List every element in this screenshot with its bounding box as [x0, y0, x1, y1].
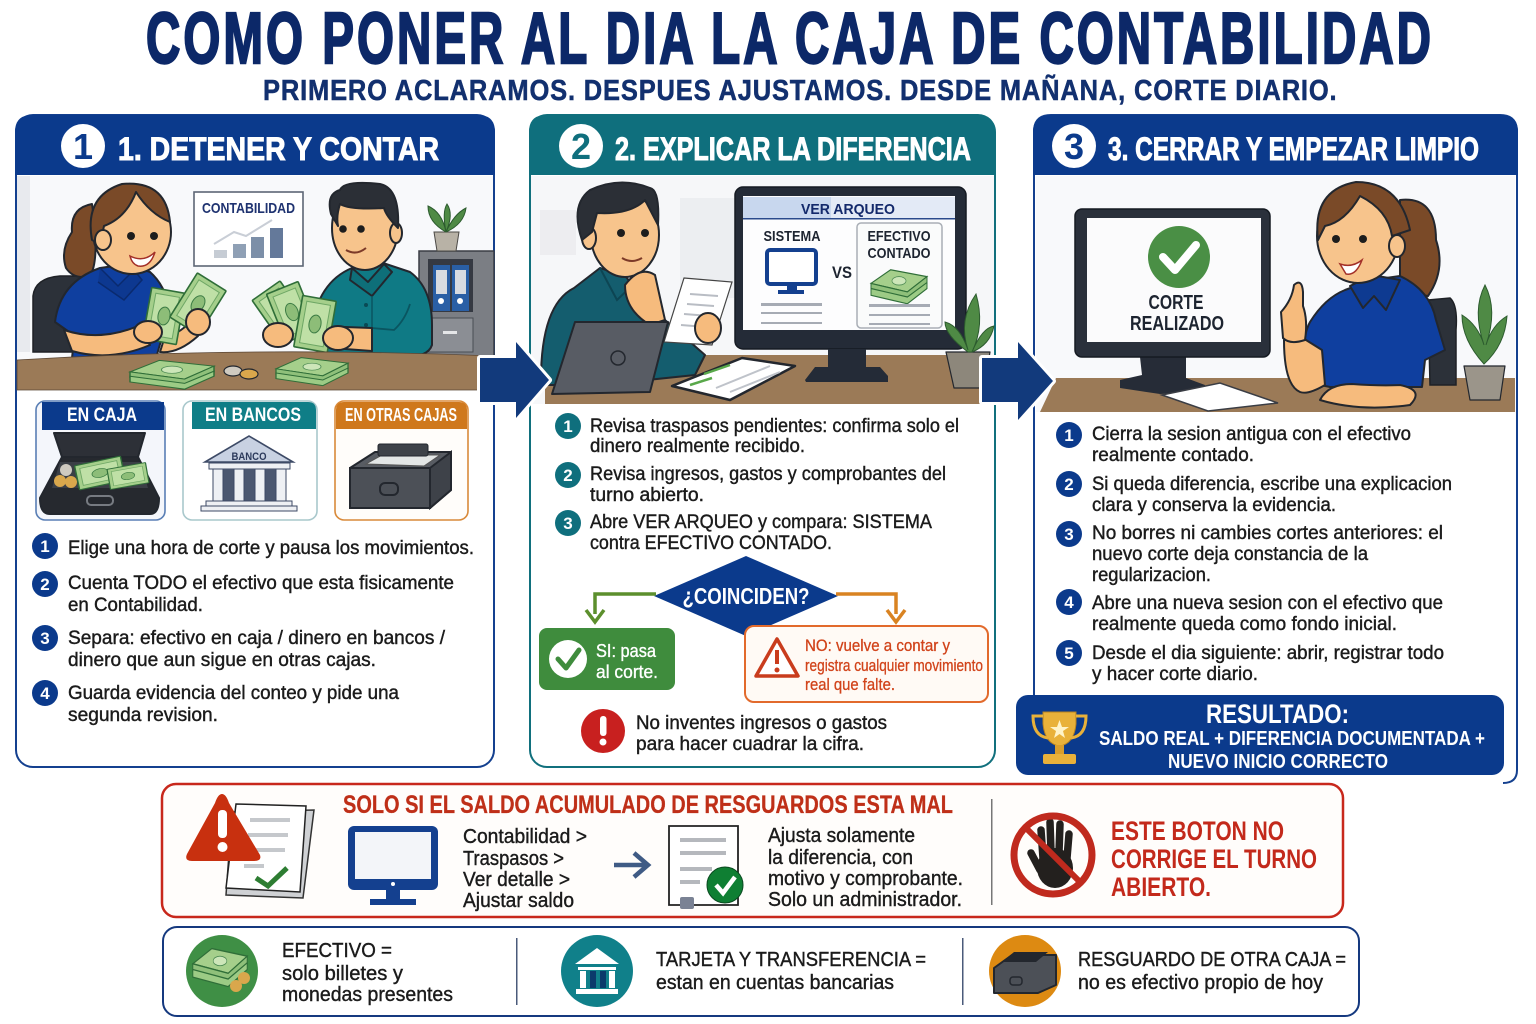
warning heading: SOLO SI EL SALDO ACUMULADO DE RESGUARDOS ESTA MAL	[343, 791, 953, 819]
outcome: yes: SI: pasa	[596, 641, 657, 661]
item 3.5	[1056, 640, 1444, 685]
card: en bancos	[183, 401, 317, 520]
man counting bills	[252, 183, 432, 357]
panel 2 header: 2	[571, 126, 591, 167]
list: step 3	[1056, 422, 1452, 685]
potted plant	[945, 294, 994, 388]
subtitle: PRIMERO ACLARAMOS. DESPUES AJUSTAMOS. DESDE MAÑANA, CORTE DIARIO.	[263, 73, 1337, 106]
legend: resguardo de otra caja: RESGUARDO DE OTRA CAJA =	[1078, 949, 1346, 971]
panel: saldo acumulado warning	[162, 784, 1343, 917]
monitor: ver arqueo: SISTEMA	[764, 228, 821, 245]
item 2.2: 2	[563, 466, 573, 485]
item 1.4	[32, 680, 399, 726]
item 3.1: Cierra la sesion antigua con el efectivo	[1092, 423, 1411, 445]
item 1.3: Separa: efectivo en caja / dinero en bancos /	[68, 627, 446, 649]
route text: Ver detalle >	[463, 869, 570, 891]
item 3.2: 2	[1064, 475, 1074, 494]
item 3.1: 1	[1064, 426, 1074, 445]
item 1.3: dinero que aun sigue en otras cajas.	[68, 649, 376, 671]
result banner	[1016, 695, 1504, 775]
legend: resguardo de otra caja	[989, 935, 1346, 1007]
monitor: corte realizado: REALIZADO	[1130, 313, 1224, 335]
icon: warning triangle and document	[186, 794, 314, 898]
illustration: two people counting cash	[17, 176, 494, 390]
arrow: yes	[586, 594, 656, 622]
monitor: corte realizado	[1075, 209, 1270, 394]
item 2.3	[555, 510, 932, 554]
result banner: RESULTADO:	[1206, 699, 1349, 729]
item 3.4: realmente queda como fondo inicial.	[1092, 613, 1397, 635]
outcome: yes	[539, 628, 675, 690]
legend: efectivo: EFECTIVO =	[282, 940, 392, 962]
item 1.4: Guarda evidencia del conteo y pide una	[68, 682, 399, 704]
item 1.3	[32, 625, 446, 671]
panel 3 header: 3	[1064, 126, 1084, 167]
item 2.3: contra EFECTIVO CONTADO.	[590, 532, 832, 554]
adjustment text: Solo un administrador.	[768, 889, 962, 911]
item 2.3: 3	[563, 514, 573, 533]
item 1.1: 1	[40, 537, 50, 556]
item 3.1: realmente contado.	[1092, 444, 1254, 466]
outcome: no: real que falte.	[805, 676, 895, 694]
woman	[1281, 182, 1456, 408]
list: step 1	[32, 533, 474, 726]
item 3.3: regularizacion.	[1092, 564, 1211, 586]
panel 1 header: 1	[73, 126, 93, 167]
card: en caja	[36, 401, 165, 520]
route text: Ajustar saldo	[463, 890, 574, 912]
legend: tarjeta y transferencia: estan en cuentas bancarias	[656, 972, 894, 994]
item 2.2	[555, 462, 946, 506]
panel 3 header	[1033, 115, 1518, 175]
panel 1 header	[15, 115, 495, 175]
result banner: NUEVO INICIO CORRECTO	[1168, 750, 1388, 773]
adjustment text: la diferencia, con	[768, 847, 913, 869]
woman counting bills	[33, 184, 226, 358]
item 3.2	[1056, 471, 1452, 516]
monitor: ver arqueo: VER ARQUEO	[801, 201, 895, 218]
item 1.4: segunda revision.	[68, 704, 218, 726]
panel: 3. cerrar y empezar limpio	[1016, 115, 1518, 783]
filing cabinet with plant	[419, 204, 494, 357]
item 1.2	[32, 571, 454, 616]
chart board: contabilidad: CONTABILIDAD	[202, 200, 295, 217]
man thinking with paper	[541, 182, 732, 394]
monitor: ver arqueo: VS	[832, 263, 852, 282]
warning statement: CORRIGE EL TURNO	[1111, 844, 1317, 874]
illustration: woman with thumbs up	[1036, 176, 1515, 412]
monitor: corte realizado: CORTE	[1148, 292, 1204, 314]
route text: Traspasos >	[463, 848, 564, 870]
legend: efectivo: monedas presentes	[282, 984, 453, 1006]
monitor: ver arqueo	[735, 187, 966, 382]
arrow: no	[836, 594, 905, 622]
item 3.2: clara y conserva la evidencia.	[1092, 494, 1336, 516]
outcome: yes: al corte.	[596, 662, 658, 682]
panel: legend	[163, 927, 1359, 1016]
item 2.1: 1	[563, 417, 573, 436]
adjustment text: Ajusta solamente	[768, 825, 915, 847]
monitor: ver arqueo: EFECTIVO	[868, 228, 931, 245]
item 3.3: 3	[1064, 525, 1074, 544]
warning statement	[1111, 816, 1317, 902]
icon: prohibited hand	[1014, 816, 1092, 894]
item 2.2: Revisa ingresos, gastos y comprobantes del	[590, 463, 946, 485]
warning statement: ESTE BOTON NO	[1111, 816, 1284, 846]
potted plant	[1462, 285, 1507, 400]
item 2.1	[555, 413, 959, 457]
warning statement: ABIERTO.	[1111, 872, 1211, 902]
decision diamond: ¿COINCIDEN?	[682, 583, 810, 609]
item 3.2: Si queda diferencia, escribe una explicacion	[1092, 473, 1452, 495]
arrow: route to document	[614, 853, 648, 877]
item 3.5: Desde el dia siguiente: abrir, registrar todo	[1092, 642, 1444, 664]
panel 1 header: 1. DETENER Y CONTAR	[118, 131, 439, 167]
item 3.5: 5	[1064, 644, 1074, 663]
card: en otras cajas	[335, 401, 468, 520]
item 1.2: en Contabilidad.	[68, 594, 203, 616]
warning note: No inventes ingresos o gastos	[636, 712, 887, 734]
item 2.2: turno abierto.	[590, 484, 704, 506]
item 1.1: Elige una hora de corte y pausa los movimientos.	[68, 537, 474, 559]
card: en otras cajas: EN OTRAS CAJAS	[345, 405, 457, 425]
illustration: man comparing on monitor	[531, 176, 994, 404]
arrow: step 2 to step 3	[982, 342, 1053, 420]
item 2.3: Abre VER ARQUEO y compara: SISTEMA	[590, 511, 932, 533]
item 3.4: Abre una nueva sesion con el efectivo que	[1092, 592, 1443, 614]
warning note	[581, 709, 887, 755]
item 3.3: No borres ni cambies cortes anteriores: el	[1092, 522, 1443, 544]
outcome: no: NO: vuelve a contar y	[805, 637, 951, 655]
item 1.3: 3	[40, 629, 50, 648]
warning note: para hacer cuadrar la cifra.	[636, 733, 864, 755]
card: en caja: EN CAJA	[67, 405, 137, 426]
legend: efectivo: solo billetes y	[282, 963, 403, 985]
item 2.1: dinero realmente recibido.	[590, 435, 805, 457]
icon: signed document	[669, 826, 743, 909]
item 1.2: Cuenta TODO el efectivo que esta fisicamente	[68, 572, 454, 594]
title: COMO PONER AL DIA LA CAJA DE CONTABILIDAD	[146, 0, 1431, 78]
item 3.3: nuevo corte deja constancia de la	[1092, 543, 1368, 565]
item 2.1: Revisa traspasos pendientes: confirma solo el	[590, 415, 959, 437]
item 3.4	[1056, 589, 1443, 635]
list: step 2	[555, 413, 959, 554]
card: en bancos: BANCO	[232, 451, 267, 463]
adjustment text: motivo y comprobante.	[768, 868, 963, 890]
legend: tarjeta y transferencia	[561, 935, 926, 1007]
legend: tarjeta y transferencia: TARJETA Y TRANSFERENCIA =	[656, 949, 926, 971]
route text	[463, 826, 587, 912]
item 3.5: y hacer corte diario.	[1092, 663, 1258, 685]
icon: trophy	[1033, 712, 1086, 764]
panel 2 header: 2. EXPLICAR LA DIFERENCIA	[615, 131, 971, 167]
adjustment text	[768, 825, 963, 911]
legend: efectivo	[186, 935, 453, 1007]
item 3.3	[1056, 521, 1443, 586]
item 1.2: 2	[40, 575, 50, 594]
item 1.4: 4	[40, 684, 50, 703]
route text: Contabilidad >	[463, 826, 587, 848]
decision diamond	[654, 556, 838, 636]
desk with money and coins	[17, 352, 493, 390]
panel: 1. detener y contar	[15, 115, 495, 767]
legend: resguardo de otra caja: no es efectivo propio de hoy	[1078, 972, 1323, 994]
icon: computer monitor	[348, 826, 438, 905]
item 3.4: 4	[1064, 593, 1074, 612]
card: en bancos: EN BANCOS	[205, 405, 301, 426]
monitor: ver arqueo: CONTADO	[868, 245, 931, 262]
arrow: step 1 to step 2	[480, 342, 549, 418]
outcome: no	[745, 626, 988, 702]
outcome: no: registra cualquier movimiento	[805, 657, 983, 675]
panel 2 header	[529, 115, 995, 175]
document on desk	[1162, 383, 1278, 411]
panel: 2. explicar la diferencia	[529, 115, 995, 767]
clipboard	[672, 358, 795, 400]
chart board: contabilidad	[194, 192, 303, 266]
item 3.1	[1056, 422, 1411, 466]
